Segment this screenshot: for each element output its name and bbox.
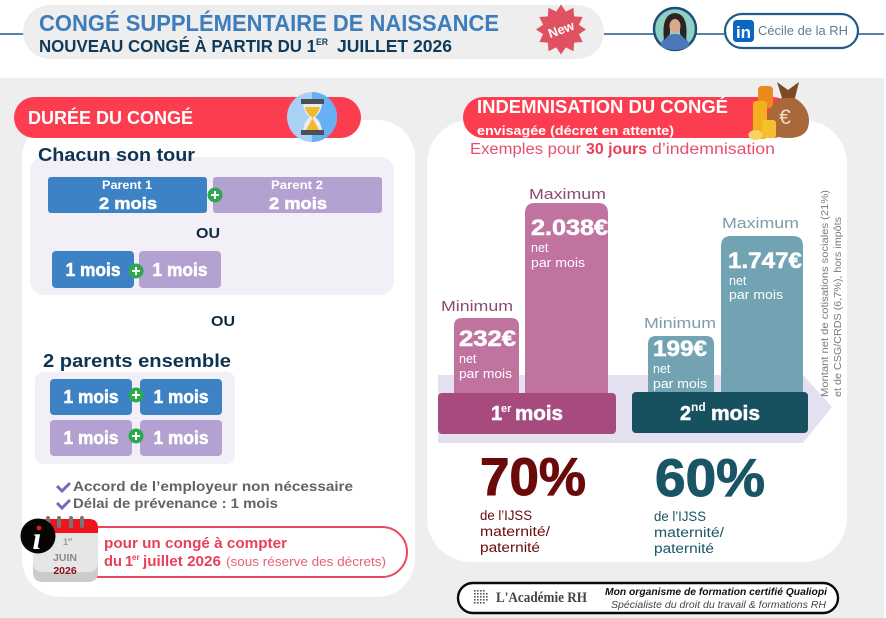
icon: plus	[128, 388, 144, 402]
icon: plus	[128, 428, 144, 444]
linkedin badge	[725, 14, 858, 48]
block: 1 mois blue left	[50, 379, 132, 415]
heading: 2 parents ensemble: 2 parents ensemble	[43, 351, 231, 371]
heading: durée du congé: DURÉE DU CONGÉ	[28, 107, 193, 128]
bar: 1er mois minimum	[441, 298, 519, 393]
bar: 1er mois minimum: Minimum	[441, 298, 513, 315]
bar: 2nd mois minimum: Minimum	[644, 315, 716, 332]
bar: 2nd mois maximum	[721, 215, 803, 392]
callout: date: du	[104, 554, 122, 570]
footer badge: Spécialiste du droit du travail & formations RH	[611, 599, 826, 611]
subtitle	[39, 35, 452, 56]
icon: info: ı	[33, 520, 41, 556]
label: 1er mois: mois	[515, 403, 563, 425]
icon: calendar: JUIN	[53, 552, 77, 564]
heading: indemnisation: INDEMNISATION DU CONGÉ	[477, 96, 728, 117]
block: 1 mois purple	[139, 251, 221, 288]
label: 2nd mois: 2	[680, 403, 691, 425]
panel: 2 parents ensemble	[35, 351, 235, 464]
block: 1 mois blue right: 1 mois	[154, 387, 208, 407]
subheading: exemples: Exemples pour	[470, 141, 581, 158]
block: parent 1: 2 mois	[99, 194, 157, 213]
footer badge	[458, 583, 838, 613]
block: 1 mois blue: 1 mois	[66, 260, 120, 280]
bar: 1er mois maximum	[525, 186, 608, 393]
header title block	[23, 5, 604, 59]
icon: new badge	[536, 4, 586, 54]
bar: 1er mois maximum: par mois	[531, 256, 585, 270]
label: 2nd mois	[632, 392, 808, 433]
stat: 60%: paternité	[654, 541, 714, 556]
heading: chacun son tour: Chacun son tour	[38, 145, 195, 165]
callout: date: (sous réserve des décrets)	[226, 555, 386, 569]
block: parent 1	[48, 177, 207, 213]
bar: 2nd mois maximum: par mois	[729, 288, 783, 302]
checklist: Accord de l’employeur non nécessaire	[73, 478, 353, 494]
icon: logo dots	[474, 590, 488, 604]
callout: date: pour un congé à compter	[104, 536, 287, 552]
icon: plus	[208, 188, 222, 202]
bar: 2nd mois maximum: net	[729, 274, 747, 288]
bar: 2nd mois maximum: 1.747€	[728, 248, 802, 273]
subtitle: NOUVEAU CONGÉ À PARTIR DU 1	[39, 35, 316, 56]
stat: 70%: maternité/	[480, 524, 550, 539]
block: 1 mois purple: 1 mois	[152, 260, 208, 280]
icon: info	[20, 518, 56, 556]
stat: 60%: de l’IJSS	[654, 509, 706, 524]
stat: 70%	[480, 448, 586, 555]
icon: new badge: New	[546, 18, 577, 41]
stat: 60%	[654, 449, 765, 556]
checklist: Délai de prévenance : 1 mois	[73, 495, 278, 511]
icon: calendar: 2026	[53, 565, 77, 577]
block: 1 mois purple left	[50, 420, 132, 456]
subtitle: ER	[316, 37, 328, 47]
callout: date	[70, 527, 407, 577]
bar: 2nd mois minimum: net	[653, 362, 671, 376]
stat: 60%: maternité/	[654, 525, 724, 540]
subheading: exemples: d’indemnisation	[652, 141, 775, 158]
note: vertical	[819, 190, 844, 397]
bar: 1er mois maximum: net	[531, 241, 549, 255]
block: parent 2: Parent 2	[271, 180, 323, 192]
footer badge: Mon organisme de formation certifié Qualiopi	[605, 586, 828, 598]
label: ou: OU	[211, 313, 235, 330]
bar: 1er mois minimum: 232€	[459, 326, 516, 351]
bar: 1er mois maximum: 2.038€	[531, 215, 608, 240]
block: 1 mois purple left: 1 mois	[64, 428, 118, 448]
callout: date: 1	[125, 554, 133, 570]
title: CONGÉ SUPPLÉMENTAIRE DE NAISSANCE	[39, 9, 499, 36]
label: 2nd mois: nd	[691, 400, 706, 414]
subtitle: JUILLET 2026	[337, 36, 452, 56]
checklist	[57, 478, 353, 511]
block: 1 mois blue	[52, 251, 134, 288]
icon: calendar: 1	[63, 537, 68, 547]
bar: 2nd mois minimum: 199€	[653, 336, 707, 361]
panel: durée du congé	[14, 92, 415, 597]
label: 1er mois	[438, 393, 616, 434]
heading: indemnisation	[463, 96, 793, 138]
callout: date: er	[132, 553, 140, 562]
footer badge: L'Académie RH	[496, 590, 588, 606]
label: 1er mois: er	[501, 403, 512, 415]
callout: date: juillet 2026	[142, 554, 221, 570]
icon: plus	[128, 264, 144, 278]
heading: durée du congé	[14, 97, 361, 138]
bar: 1er mois minimum: net	[459, 352, 477, 366]
stat: 70%: 70%	[480, 448, 586, 507]
stat: 70%: de l’IJSS	[480, 508, 532, 523]
panel: chacun son tour	[30, 145, 394, 295]
bar: 2nd mois minimum	[644, 315, 716, 392]
icon: money bag	[748, 82, 809, 140]
label: 1er mois: 1	[491, 403, 502, 425]
block: 1 mois blue right	[140, 379, 222, 415]
stat: 70%: paternité	[480, 540, 540, 555]
subheading: exemples	[470, 141, 775, 158]
icon: calendar: er	[68, 537, 73, 543]
linkedin badge: Cécile de la RH	[758, 23, 848, 38]
note: vertical: et de CSG/CRDS (6,7%), hors impôts	[832, 217, 844, 397]
heading: indemnisation: envisagée (décret en attente)	[477, 123, 674, 138]
block: parent 2	[213, 177, 382, 213]
block: 1 mois blue left: 1 mois	[64, 387, 118, 407]
block: 1 mois purple right: 1 mois	[154, 428, 208, 448]
label: 2nd mois: mois	[711, 403, 760, 425]
note: vertical: Montant net de cotisations sociales (21%)	[819, 190, 831, 397]
arrow	[438, 375, 832, 443]
bar: 1er mois maximum: Maximum	[529, 186, 606, 203]
block: parent 2: 2 mois	[269, 194, 327, 213]
icon: money bag: €	[779, 106, 791, 129]
block: parent 1: Parent 1	[102, 180, 153, 192]
stat: 60%: 60%	[655, 449, 765, 508]
block: 1 mois purple right	[140, 420, 222, 456]
bar: 2nd mois minimum: par mois	[653, 377, 707, 391]
icon: linkedin: in	[736, 23, 751, 42]
icon: portrait photo	[654, 8, 696, 50]
panel: indemnisation du congé	[427, 82, 847, 562]
label: ou: OU	[196, 225, 220, 242]
bar: 2nd mois maximum: Maximum	[722, 215, 799, 232]
subheading: exemples: 30 jours	[586, 141, 647, 158]
bar: 1er mois minimum: par mois	[459, 367, 512, 381]
icon: hourglass	[287, 92, 337, 142]
icon: calendar	[33, 516, 98, 582]
